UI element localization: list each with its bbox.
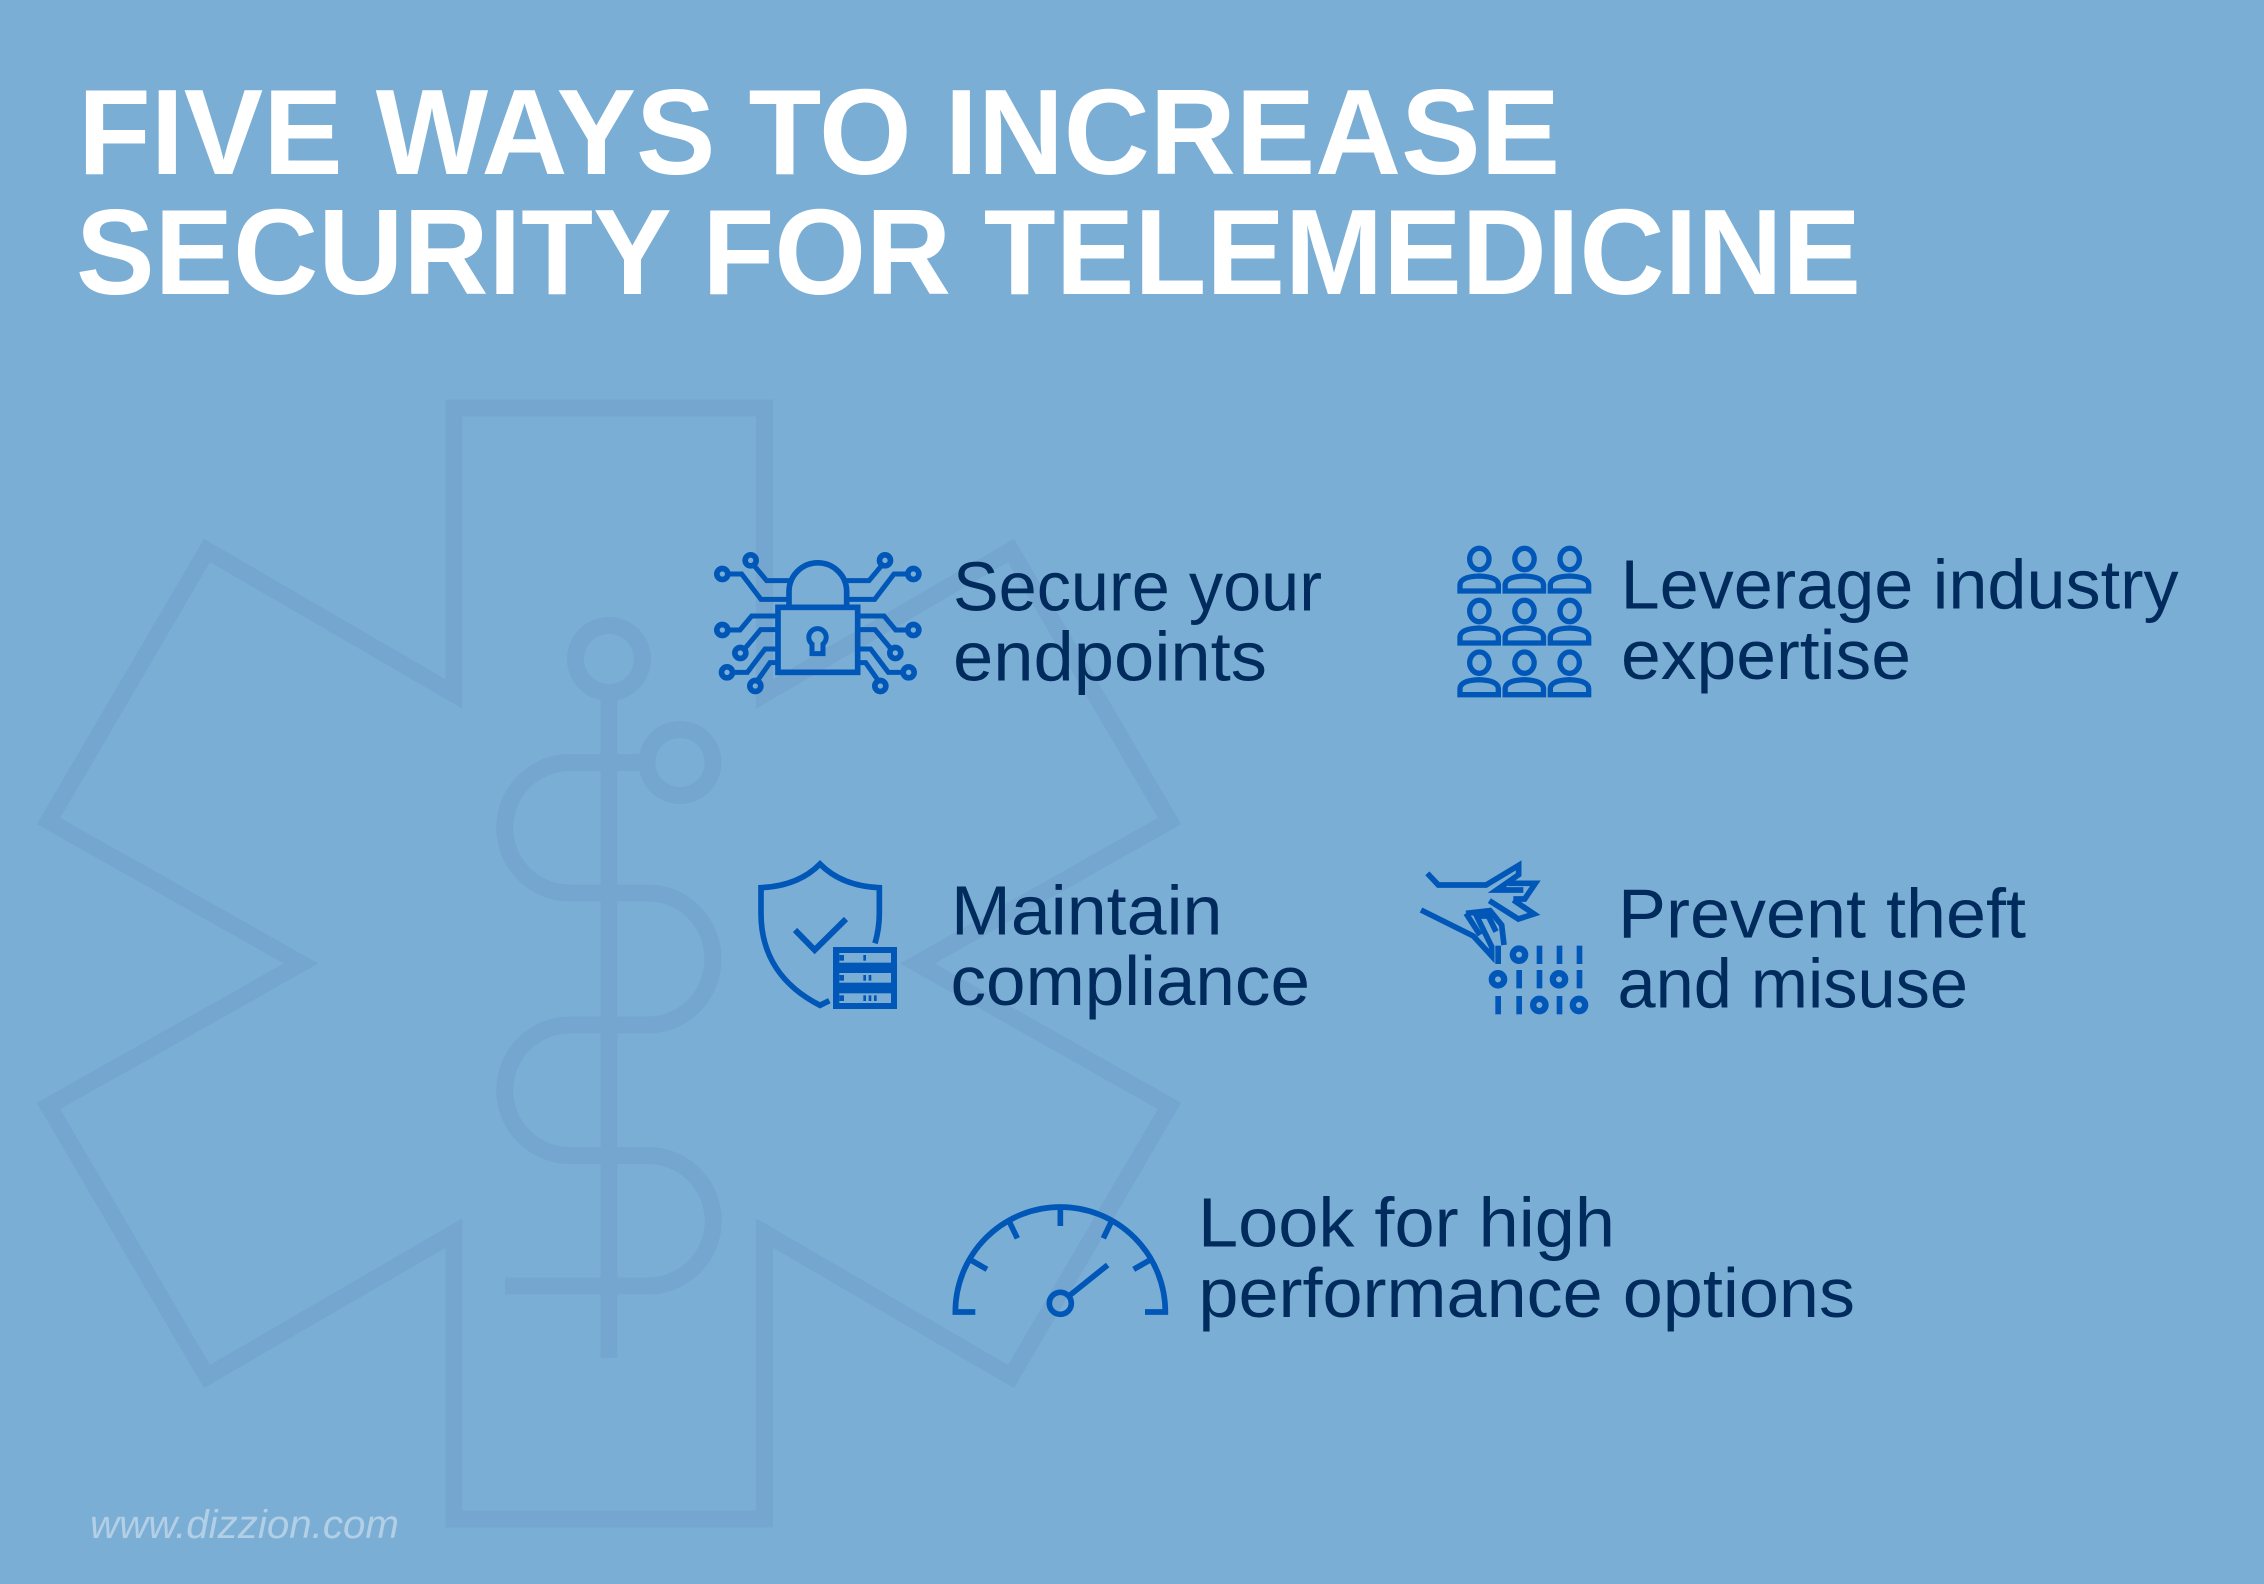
text: prevent theft and misuse bbox=[1618, 874, 2026, 1022]
text: maintain compliance: Maintain bbox=[951, 872, 1222, 950]
rod with top ring bbox=[576, 626, 642, 1358]
snake bbox=[505, 730, 713, 1286]
title: FIVE WAYS TO INCREASE bbox=[78, 64, 1560, 200]
text: secure your endpoints: Secure your bbox=[953, 548, 1322, 626]
text: leverage industry expertise bbox=[1621, 546, 2179, 694]
icon: speedometer gauge bbox=[955, 1207, 1165, 1314]
text: leverage industry expertise: Leverage industry bbox=[1621, 546, 2179, 624]
text: maintain compliance bbox=[950, 872, 1310, 1020]
icon: hand grabbing binary data bbox=[1421, 865, 1585, 1014]
star of life outline bbox=[48, 408, 1170, 1519]
text: prevent theft and misuse: Prevent theft bbox=[1618, 874, 2026, 952]
icon: group of nine people bbox=[1460, 548, 1589, 695]
icon: padlock circuit bug bbox=[717, 555, 919, 691]
title: SECURITY FOR TELEMEDICINE bbox=[76, 184, 1861, 320]
text: leverage industry expertise: expertise bbox=[1621, 616, 1911, 694]
icon: shield with check and server bbox=[761, 864, 897, 1009]
text: secure your endpoints bbox=[953, 548, 1322, 696]
text: look for high performance options bbox=[1198, 1184, 1855, 1332]
text: look for high performance options: Look for high bbox=[1198, 1184, 1615, 1262]
text: look for high performance options: performance options bbox=[1198, 1254, 1855, 1332]
text: prevent theft and misuse: and misuse bbox=[1618, 944, 1968, 1022]
text: secure your endpoints: endpoints bbox=[953, 618, 1267, 696]
website url: www.dizzion.com bbox=[90, 1503, 399, 1547]
text: maintain compliance: compliance bbox=[950, 942, 1310, 1020]
title bbox=[76, 64, 1861, 320]
watermark: star of life with rod and snake bbox=[48, 408, 1170, 1519]
